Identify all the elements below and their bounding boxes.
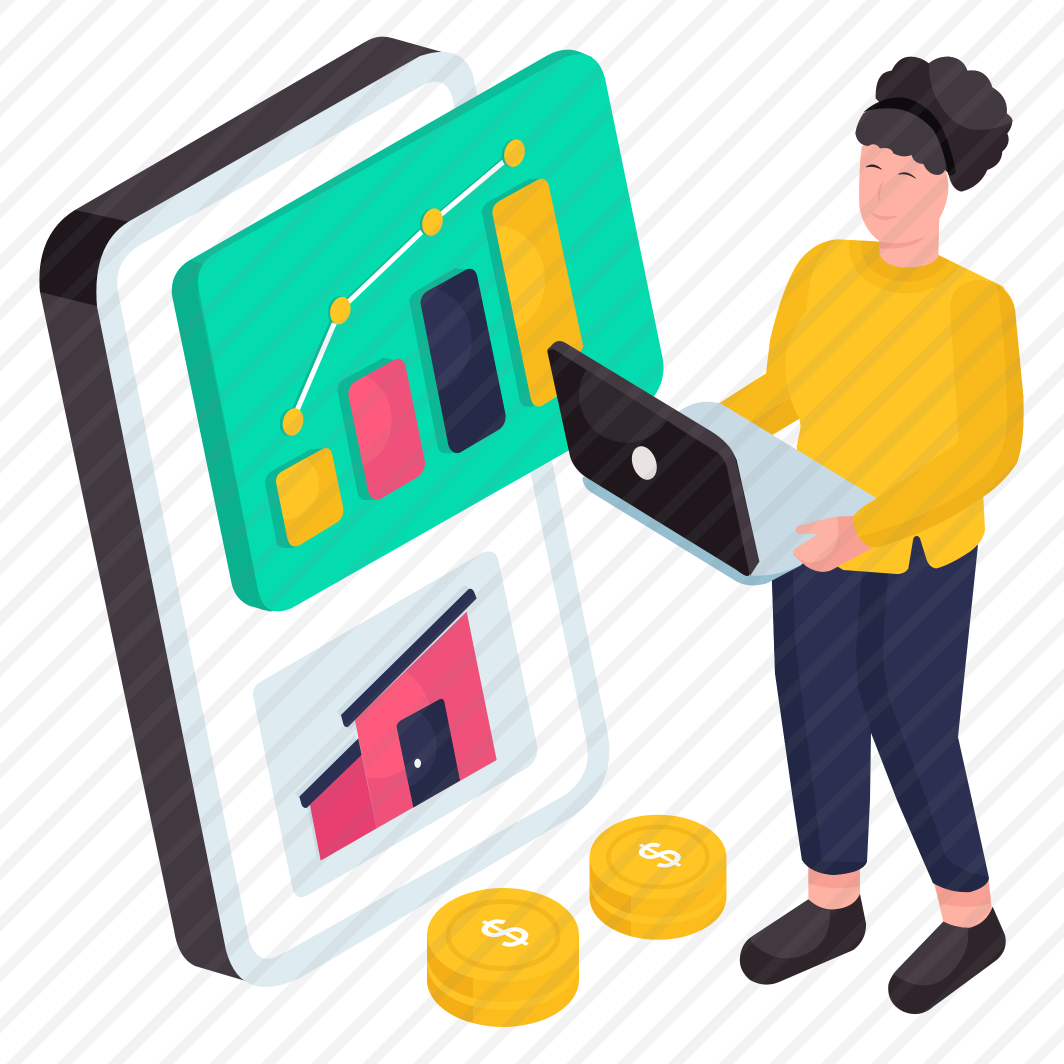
headband — [863, 97, 956, 176]
trousers — [771, 530, 989, 892]
laptop keyboard deck — [677, 402, 879, 576]
person — [547, 57, 1024, 1014]
card corner — [172, 260, 272, 612]
panel background — [253, 551, 537, 897]
lower roof — [299, 738, 362, 808]
phone dark body — [39, 37, 442, 984]
laptop — [547, 341, 879, 585]
door — [397, 699, 460, 808]
left shoe highlight — [750, 899, 830, 958]
trouser shades — [772, 570, 988, 892]
collar shade — [849, 240, 959, 293]
hand — [793, 516, 872, 572]
card depth — [172, 50, 592, 611]
house main wall — [355, 612, 497, 828]
right ankle shade — [933, 877, 991, 907]
laptop screen back — [547, 345, 759, 576]
eye right — [898, 173, 916, 178]
dollar sign: $ — [463, 909, 546, 956]
far arm — [718, 239, 838, 437]
right shoe highlight — [893, 922, 968, 985]
door knob — [414, 759, 421, 768]
bars and line — [251, 178, 583, 548]
house lower wall — [310, 755, 377, 861]
left ankle shade — [808, 860, 860, 888]
hair fringe — [855, 108, 946, 175]
phone corner — [39, 210, 130, 306]
laptop base edge — [582, 477, 802, 585]
hand highlight — [793, 517, 838, 562]
phone — [39, 37, 609, 987]
hair highlight — [929, 57, 1012, 130]
neck — [879, 217, 939, 268]
coin stack small — [590, 815, 726, 940]
coin stack large — [427, 888, 579, 1027]
face — [859, 140, 948, 246]
door highlight — [396, 711, 436, 786]
sleeve — [853, 280, 1024, 547]
feet — [740, 860, 1006, 1014]
house — [295, 585, 497, 861]
bar navy — [409, 268, 506, 454]
hand and near arm — [793, 280, 1024, 572]
smile — [870, 212, 900, 220]
screen reflection — [579, 370, 666, 442]
eye left — [866, 165, 882, 169]
phone frame — [96, 52, 609, 987]
card face — [198, 54, 664, 611]
laptop logo — [627, 443, 661, 483]
left shoe — [740, 894, 866, 985]
sleeve shade — [858, 283, 1024, 547]
nose — [878, 181, 885, 203]
wall highlight — [355, 671, 430, 778]
upper roof — [341, 589, 477, 727]
house panel — [253, 551, 537, 897]
neck and head — [855, 57, 1012, 268]
chin shadow — [880, 237, 925, 249]
roof shadow — [295, 585, 470, 857]
right shoe — [888, 907, 1006, 1014]
dollar sign: $ — [623, 834, 697, 876]
hair back — [876, 57, 1012, 192]
sweater — [785, 239, 1024, 574]
bar small yellow — [265, 448, 344, 548]
left ankle — [808, 860, 860, 909]
green chart card — [172, 50, 664, 612]
line chart — [277, 137, 528, 438]
right ankle — [933, 877, 993, 928]
bar large yellow — [482, 178, 584, 407]
laptop rim — [547, 341, 759, 576]
bar pink — [337, 358, 425, 500]
